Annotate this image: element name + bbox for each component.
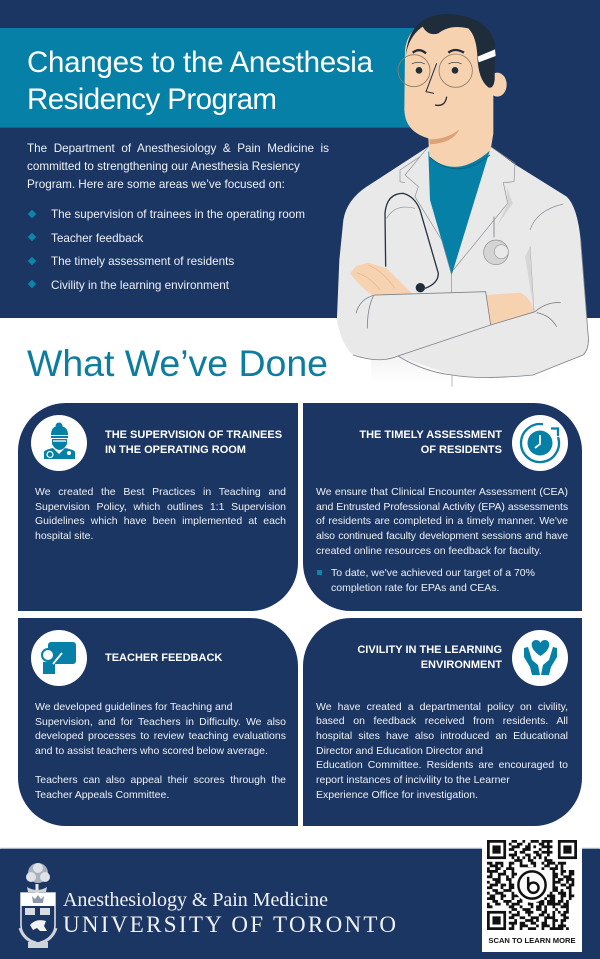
heading: What We've Done: What We’ve Done xyxy=(27,342,328,384)
body text: Guidelines which have been implemented at each xyxy=(35,515,286,527)
body text: Director and Education Director and xyxy=(316,745,483,757)
icon: hands holding heart xyxy=(512,630,568,686)
panel: civility xyxy=(303,618,582,826)
intro text: Program. Here are some areas we’ve focused on: xyxy=(27,178,285,191)
completion bullet xyxy=(317,567,535,594)
body text: and to assist teachers who scored below average. xyxy=(35,745,268,757)
body text xyxy=(316,701,568,801)
header background xyxy=(0,0,600,318)
intro text: The Department of Anesthesiology & Pain Medicine is xyxy=(27,142,329,155)
heading xyxy=(359,429,502,456)
heading: OF RESIDENTS xyxy=(421,444,502,456)
heading: TEACHER FEEDBACK xyxy=(105,652,222,664)
body text: Supervision, and for Teachers in Difficulty. We also xyxy=(35,716,286,728)
body text xyxy=(35,701,286,801)
body text: of residents are completed in a timely manner. We've xyxy=(316,515,568,527)
heading: CIVILITY IN THE LEARNING xyxy=(357,644,502,656)
completion bullet: To date, we've achieved our target of a 70% xyxy=(331,567,535,579)
title: Residency Program xyxy=(27,83,277,116)
body text: Supervision Policy, which outlines 1:1 Supervision xyxy=(35,501,286,513)
body text xyxy=(35,486,286,542)
focus areas bullet list: The timely assessment of residents xyxy=(51,255,234,268)
body text: hospital sites have also introduced an Educational xyxy=(316,730,568,742)
body text: Experience Office for investigation. xyxy=(316,789,478,801)
heading xyxy=(357,644,502,671)
panel: timely assessment xyxy=(303,403,582,611)
heading xyxy=(105,429,282,456)
body text: Education Committee. Residents are encouraged to xyxy=(316,759,568,771)
body text: report instances of incivility to the Learner xyxy=(316,774,510,786)
title band xyxy=(0,28,420,128)
footer band xyxy=(0,849,600,959)
icon: surgeon xyxy=(31,415,87,471)
heading: THE TIMELY ASSESSMENT xyxy=(359,429,502,441)
body text: also continued faculty development sessions and have xyxy=(316,530,568,542)
body text: and Entrusted Professional Activity (EPA) assessments xyxy=(316,501,568,513)
body text: We have created a departmental policy on civility, xyxy=(316,701,568,713)
focus areas bullet list: Civility in the learning environment xyxy=(51,279,229,292)
department and university wordmark xyxy=(63,889,396,937)
heading: ENVIRONMENT xyxy=(421,659,502,671)
panel: teacher feedback xyxy=(18,618,298,826)
panel: supervision of trainees xyxy=(18,403,298,611)
focus areas bullet list: Teacher feedback xyxy=(51,232,143,245)
QR caption: SCAN TO LEARN MORE xyxy=(488,936,576,945)
focus areas bullet list xyxy=(28,208,305,292)
focus areas bullet list: The supervision of trainees in the operating room xyxy=(51,208,305,221)
body text: hospital site. xyxy=(35,530,93,542)
intro text xyxy=(27,142,329,191)
body text: developed processes to review teaching evaluations xyxy=(35,730,286,742)
body text xyxy=(316,486,568,557)
body text: We developed guidelines for Teaching and xyxy=(35,701,233,713)
heading: IN THE OPERATING ROOM xyxy=(105,444,246,456)
department and university wordmark: UNIVERSITY OF TORONTO xyxy=(63,912,396,937)
body text: We created the Best Practices in Teaching and xyxy=(35,486,286,498)
heading: THE SUPERVISION OF TRAINEES xyxy=(105,429,282,441)
body text: created online resources on feedback for faculty. xyxy=(316,545,542,557)
icon: clock with arrow xyxy=(512,415,568,471)
QR code panel xyxy=(482,835,582,952)
department and university wordmark: Anesthesiology & Pain Medicine xyxy=(63,889,328,911)
illustration: doctor with crossed arms xyxy=(337,14,589,387)
completion bullet: completion rate for EPAs and CEAs. xyxy=(331,582,499,594)
title xyxy=(27,46,374,116)
QR code xyxy=(487,840,577,930)
body text: Teachers can also appeal their scores through the xyxy=(35,774,286,786)
icon: teacher at board xyxy=(31,630,87,686)
body text: Teacher Appeals Committee. xyxy=(35,789,169,801)
University of Toronto crest xyxy=(18,863,58,948)
title: Changes to the Anesthesia xyxy=(27,46,374,79)
body text: We ensure that Clinical Encounter Assessment (CEA) xyxy=(316,486,568,498)
body text: based on feedback received from residents. All xyxy=(316,715,568,727)
intro text: committed to strengthening our Anesthesia Resiency xyxy=(27,160,300,173)
